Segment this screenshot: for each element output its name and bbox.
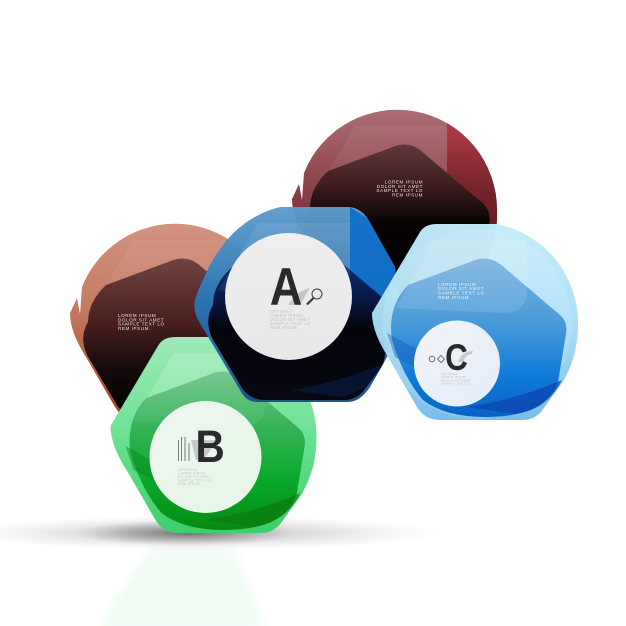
orange shape text	[118, 313, 165, 331]
light blue shape text: LOREM IPSUM	[438, 282, 476, 287]
option B circle	[150, 401, 262, 513]
option A caption: OPTION A	[270, 309, 293, 314]
red shape text: REM IPSUM	[392, 192, 423, 198]
red shape text: SAMPLE TEXT LO	[376, 188, 423, 193]
option C caption: LOREM IPSUM	[441, 375, 466, 379]
option A caption: SAMPLE TEXT LO	[270, 321, 311, 326]
light blue shape text	[438, 282, 485, 300]
option B caption: DOLOR SIT AMET	[178, 475, 211, 479]
option C caption: OPTION A	[441, 372, 458, 376]
red shape text	[376, 180, 423, 198]
option A caption	[270, 309, 311, 330]
orange shape text: LOREM IPSUM	[118, 313, 156, 318]
option A caption: LOREM IPSUM	[270, 313, 303, 318]
option A caption: REM IPSUM	[270, 325, 297, 330]
panel: green shape B	[110, 337, 317, 533]
orange shape text: DOLOR SIT AMET	[118, 318, 164, 322]
orange shape text: SAMPLE TEXT LO	[118, 322, 165, 326]
icon: magnifier	[307, 289, 322, 304]
panel: red shape	[292, 110, 498, 274]
reflection of green shape	[97, 548, 265, 626]
panel: blue shape A	[194, 207, 408, 402]
option B caption: LOREM IPSUM	[178, 472, 206, 476]
floor shadow	[0, 516, 440, 550]
panel: light blue shape C	[372, 224, 578, 420]
light blue shape text: DOLOR SIT AMET	[438, 286, 484, 291]
option B caption: OPTION A	[178, 468, 197, 472]
option C caption	[441, 372, 472, 386]
panel: orange shape	[70, 224, 228, 412]
letter C: C	[445, 338, 468, 379]
icon: grey wedge behind B	[191, 440, 217, 460]
orange shape text: REM IPSUM	[118, 326, 149, 331]
option C caption: SAMPLE TEXT LO	[441, 382, 472, 386]
red shape text: LOREM IPSUM	[385, 180, 423, 184]
red shape text: DOLOR SIT AMET	[377, 184, 423, 189]
icon: grey wedge behind A	[288, 287, 310, 305]
option B caption: REM IPSUM	[178, 482, 200, 486]
icon: bars	[178, 437, 189, 461]
option A caption: DOLOR SIT AMET	[270, 317, 310, 322]
icon: grey arc behind C	[458, 351, 473, 362]
light blue shape text: REM IPSUM	[438, 295, 469, 300]
option C circle	[414, 320, 500, 406]
infographic canvas	[0, 110, 578, 626]
light blue shape text: SAMPLE TEXT LO	[438, 290, 485, 296]
letter A: A	[270, 258, 302, 317]
icon: circle and diamond	[429, 356, 444, 362]
option B caption	[178, 468, 212, 486]
letter B: B	[196, 422, 225, 473]
option A circle	[225, 233, 352, 360]
option B caption: SAMPLE TEXT LO	[178, 478, 212, 482]
option C caption: DOLOR SIT AMET	[441, 378, 471, 382]
